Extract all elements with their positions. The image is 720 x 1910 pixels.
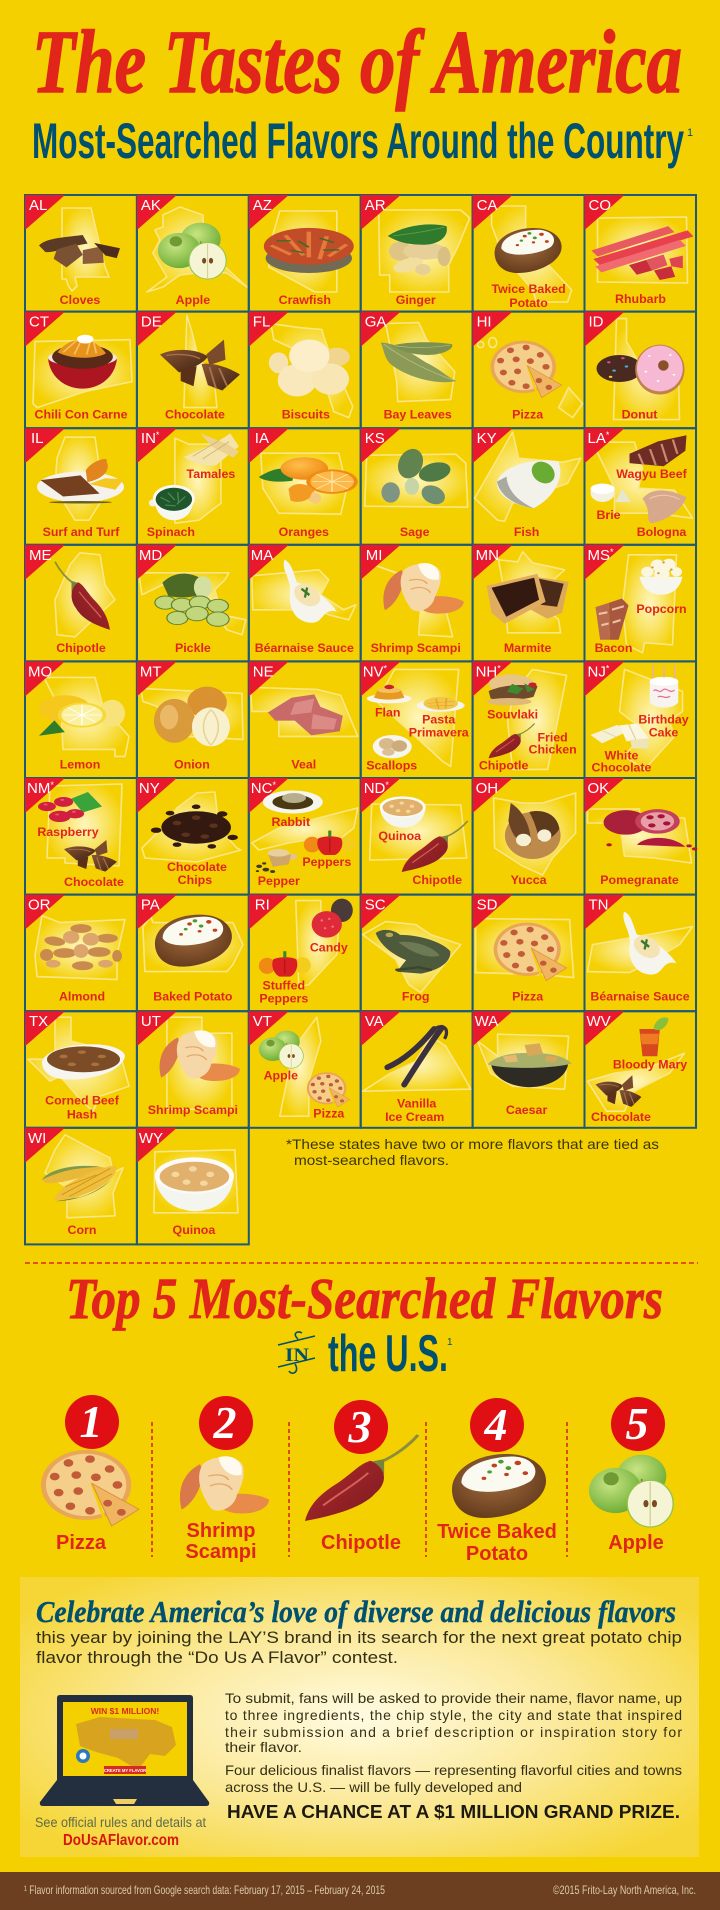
rank 5: Apple: Apple <box>608 1532 664 1554</box>
cell: California, Twice Baked Potato: Potato <box>509 296 548 310</box>
cell: Nevada, Flan, Pasta Primavera, Scallops <box>361 661 473 778</box>
cell: New Jersey, Birthday Cake, White Chocolate: White <box>605 748 638 762</box>
cell: North Carolina, Rabbit, Peppers, Pepper: * <box>272 780 276 790</box>
cell: Mississippi, Popcorn and Bacon: Bacon <box>595 641 632 655</box>
rank 4: Twice Baked Potato: Twice Baked <box>437 1521 557 1543</box>
cell: Montana, Onion: Onion <box>174 757 210 771</box>
cell: Minnesota, Marmite: Marmite <box>504 641 551 655</box>
cell: New Jersey, Birthday Cake, White Chocolate <box>584 661 696 778</box>
cell: New Jersey, Birthday Cake, White Chocolate: NJ <box>588 663 606 680</box>
cell: Maine, Chipotle <box>25 545 137 661</box>
cell: Colorado, Rhubarb <box>584 195 696 312</box>
cell: New Jersey, Birthday Cake, White Chocolate: Cake <box>649 725 678 739</box>
cell: Indiana, Tamales and Spinach: * <box>156 430 160 440</box>
panel: contest information <box>20 1577 699 1857</box>
cell: New Jersey, Birthday Cake, White Chocolate: Birthday <box>638 712 689 726</box>
cell: Alabama, Cloves: AL <box>29 197 47 214</box>
cell: Missouri, Lemon <box>25 661 137 778</box>
cell: Hawaii, Pizza <box>473 312 584 428</box>
footnote: tied states: *These states have two or more flavors that are tied as <box>286 1136 659 1152</box>
cell: Georgia, Bay Leaves: Bay Leaves <box>384 408 452 422</box>
rank 5: Apple <box>589 1397 673 1554</box>
cell: Rhode Island, Candy and Stuffed Peppers: Candy <box>310 941 348 955</box>
cell: Virginia, Vanilla Ice Cream: Ice Cream <box>385 1110 444 1124</box>
text: finalists: Four delicious finalist flavors — representing flavorful cities and towns <box>225 1762 682 1778</box>
text: how to submit: To submit, fans will be asked to provide their name, flavor name, up <box>225 1690 682 1706</box>
footnote: tied states <box>286 1136 659 1168</box>
cell: Vermont, Apple and Pizza <box>249 1011 361 1128</box>
cell: North Dakota, Quinoa and Chipotle <box>361 778 473 895</box>
cell: Kentucky, Fish <box>473 428 584 545</box>
cell: South Dakota, Pizza: SD <box>477 897 498 914</box>
rank 4: Twice Baked Potato <box>437 1398 557 1565</box>
text: intro <box>36 1628 682 1667</box>
footnote: tied states: most-searched flavors. <box>294 1152 449 1168</box>
cell: Nevada, Flan, Pasta Primavera, Scallops: NV <box>363 663 384 680</box>
cell: Arizona, Crawfish <box>249 195 361 312</box>
heading: in the U.S.: the U.S. <box>328 1325 448 1383</box>
cell: Rhode Island, Candy and Stuffed Peppers <box>249 895 361 1011</box>
cell: Alabama, Cloves: Cloves <box>60 293 100 307</box>
cell: Colorado, Rhubarb: CO <box>588 197 611 214</box>
rank 3: Chipotle: 3 <box>348 1401 372 1452</box>
cell: Utah, Shrimp Scampi: Shrimp Scampi <box>148 1103 238 1117</box>
cell: Minnesota, Marmite: MN <box>476 547 499 564</box>
cell: Virginia, Vanilla Ice Cream: VA <box>365 1013 384 1030</box>
cell: Tennessee, Bearnaise Sauce <box>584 895 696 1011</box>
cell: Indiana, Tamales and Spinach: Tamales <box>187 467 235 481</box>
cell: Idaho, Donut <box>584 312 696 428</box>
cell: Tennessee, Bearnaise Sauce: Béarnaise Sauce <box>590 990 690 1004</box>
cell: Ohio, Yucca: OH <box>476 780 498 797</box>
footer band: ¹ Flavor information sourced from Google search data: February 17, 2015 – February 24, 2015 <box>24 1883 385 1897</box>
cell: New Jersey, Birthday Cake, White Chocolate: * <box>606 663 610 673</box>
cell: West Virginia, Bloody Mary and Chocolate: Bloody Mary <box>613 1058 687 1072</box>
cell: Oregon, Almond <box>25 895 137 1011</box>
text: how to submit: their submission and a brief description or inspiration story for <box>225 1724 682 1740</box>
cell: Mississippi, Popcorn and Bacon: * <box>610 547 614 557</box>
cell: New Hampshire, Souvlaki, Fried Chicken, Chipotle: Chicken <box>528 742 577 756</box>
cell: Louisiana, Wagyu Beef, Brie, Bologna: Bologna <box>637 525 686 539</box>
cell: New Mexico, Raspberry and Chocolate: * <box>50 780 54 790</box>
cell: New Hampshire, Souvlaki, Fried Chicken, Chipotle: NH <box>476 663 497 680</box>
cell: North Dakota, Quinoa and Chipotle: Quinoa <box>378 829 421 843</box>
rank 4: Twice Baked Potato: 4 <box>484 1399 508 1450</box>
cell: Iowa, Oranges: IA <box>255 430 269 447</box>
cell: California, Twice Baked Potato <box>473 195 584 312</box>
cell: Wisconsin, Corn: Corn <box>68 1223 96 1237</box>
cell: Mississippi, Popcorn and Bacon: MS <box>588 547 610 564</box>
cell: Utah, Shrimp Scampi: UT <box>141 1013 161 1030</box>
cell: North Carolina, Rabbit, Peppers, Pepper: Pepper <box>258 874 300 888</box>
cell: New Hampshire, Souvlaki, Fried Chicken, Chipotle: * <box>497 663 501 673</box>
cell: Illinois, Surf and Turf: Surf and Turf <box>43 525 120 539</box>
cell: Nebraska, Veal: NE <box>253 663 274 680</box>
cell: Wisconsin, Corn <box>25 1128 137 1244</box>
cell: Minnesota, Marmite <box>473 545 584 661</box>
cell: West Virginia, Bloody Mary and Chocolate <box>584 1011 696 1128</box>
cell: South Dakota, Pizza: Pizza <box>512 990 543 1004</box>
rank 4: Twice Baked Potato: Potato <box>466 1543 528 1565</box>
cell: Louisiana, Wagyu Beef, Brie, Bologna: Wagyu Beef <box>616 467 688 481</box>
cell: Arizona, Crawfish: Crawfish <box>279 293 331 307</box>
cell: New York, Chocolate Chips: Chocolate <box>167 860 227 874</box>
cell: Iowa, Oranges <box>249 428 361 545</box>
cell: Nevada, Flan, Pasta Primavera, Scallops: Primavera <box>409 725 469 739</box>
cell: Arkansas, Ginger: Ginger <box>396 293 436 307</box>
cell: Oklahoma, Pomegranate: Pomegranate <box>600 873 679 887</box>
text: how to submit: to three ingredients, the chip style, the city and state that inspired <box>225 1707 682 1723</box>
cell: New Hampshire, Souvlaki, Fried Chicken, Chipotle <box>473 661 584 778</box>
rank 2: Shrimp Scampi: Scampi <box>185 1541 257 1563</box>
panel: state flavor grid <box>25 195 697 1244</box>
cell: North Carolina, Rabbit, Peppers, Pepper: NC <box>251 780 272 797</box>
cell: Delaware, Chocolate: Chocolate <box>165 408 225 422</box>
cell: Pennsylvania, Baked Potato: PA <box>141 897 160 914</box>
cell: Louisiana, Wagyu Beef, Brie, Bologna: LA <box>588 430 606 447</box>
cell: New York, Chocolate Chips: Chips <box>178 873 212 887</box>
cell: Illinois, Surf and Turf <box>25 428 137 545</box>
rank 2: Shrimp Scampi: Shrimp <box>187 1520 255 1542</box>
icon: laptop with contest screen <box>40 1695 209 1806</box>
cell: Massachusetts, Bearnaise Sauce: Béarnaise Sauce <box>255 641 354 655</box>
cell: Oklahoma, Pomegranate <box>584 778 697 895</box>
cell: Missouri, Lemon: MO <box>28 663 52 680</box>
cell: New Mexico, Raspberry and Chocolate: Raspberry <box>37 825 99 839</box>
cell: Wyoming, Quinoa <box>137 1128 249 1244</box>
cell: South Carolina, Frog <box>361 895 473 1011</box>
cell: North Dakota, Quinoa and Chipotle: Chipotle <box>412 873 462 887</box>
text: finalists: across the U.S. — will be fully developed and <box>225 1779 522 1795</box>
rank 3: Chipotle: Chipotle <box>321 1532 401 1554</box>
rank 1: Pizza: 1 <box>80 1396 102 1447</box>
cell: New Hampshire, Souvlaki, Fried Chicken, Chipotle: Fried <box>537 730 568 744</box>
cell: Georgia, Bay Leaves: GA <box>365 314 386 331</box>
cell: Texas, Corned Beef Hash: Corned Beef <box>45 1094 119 1108</box>
cell: North Dakota, Quinoa and Chipotle: ND <box>364 780 385 797</box>
text: how to submit <box>225 1690 682 1755</box>
cell: Montana, Onion <box>137 661 249 778</box>
cell: Kentucky, Fish: KY <box>477 430 497 447</box>
cell: Nebraska, Veal: Veal <box>291 757 316 771</box>
cell: Pennsylvania, Baked Potato <box>137 895 249 1011</box>
text: official rules: See official rules and details at <box>35 1814 206 1830</box>
cell: New York, Chocolate Chips <box>137 778 249 895</box>
cell: Alaska, Apple: AK <box>141 197 161 214</box>
cell: Nevada, Flan, Pasta Primavera, Scallops: Scallops <box>366 758 417 772</box>
cell: Alabama, Cloves <box>25 195 137 312</box>
cell: Washington, Caesar: WA <box>475 1013 498 1030</box>
text: grand prize: HAVE A CHANCE AT A $1 MILLION GRAND PRIZE. <box>227 1802 680 1822</box>
cell: Indiana, Tamales and Spinach: Spinach <box>147 525 195 539</box>
cell: Arkansas, Ginger <box>361 195 473 312</box>
cell: Washington, Caesar <box>473 1011 584 1128</box>
cell: Mississippi, Popcorn and Bacon: Popcorn <box>636 602 687 616</box>
cell: New Mexico, Raspberry and Chocolate: NM <box>27 780 50 797</box>
cell: Pennsylvania, Baked Potato: Baked Potato <box>153 990 233 1004</box>
footer band <box>0 1872 720 1910</box>
cell: New Jersey, Birthday Cake, White Chocolate: Chocolate <box>592 760 652 774</box>
cell: Vermont, Apple and Pizza: VT <box>253 1013 272 1030</box>
cell: Massachusetts, Bearnaise Sauce <box>249 545 361 661</box>
cell: North Carolina, Rabbit, Peppers, Pepper <box>249 778 361 895</box>
cell: Virginia, Vanilla Ice Cream: Vanilla <box>397 1097 436 1111</box>
cell: Wisconsin, Corn: WI <box>28 1130 46 1147</box>
cell: Colorado, Rhubarb: Rhubarb <box>615 292 666 306</box>
cell: Nevada, Flan, Pasta Primavera, Scallops: Pasta <box>422 712 455 726</box>
rank 1: Pizza: Pizza <box>56 1532 107 1554</box>
cell: Arizona, Crawfish: AZ <box>253 197 272 214</box>
cell: Tennessee, Bearnaise Sauce: TN <box>588 897 608 914</box>
cell: Oregon, Almond: Almond <box>59 990 105 1004</box>
text: finalists <box>225 1762 682 1795</box>
cell: Kansas, Sage <box>361 428 473 545</box>
cell: Oklahoma, Pomegranate: OK <box>588 780 609 797</box>
cell: Florida, Biscuits: Biscuits <box>282 408 330 422</box>
cell: Nevada, Flan, Pasta Primavera, Scallops: * <box>384 663 388 673</box>
cell: Arkansas, Ginger: AR <box>365 197 386 214</box>
cell: Maryland, Pickle: Pickle <box>175 641 211 655</box>
cell: Louisiana, Wagyu Beef, Brie, Bologna: * <box>606 430 610 440</box>
cell: California, Twice Baked Potato: Twice Baked <box>492 282 566 296</box>
cell: Texas, Corned Beef Hash: TX <box>29 1013 48 1030</box>
cell: Montana, Onion: MT <box>140 663 162 680</box>
cell: Michigan, Shrimp Scampi <box>361 545 473 661</box>
cell: Indiana, Tamales and Spinach: IN <box>141 430 156 447</box>
cell: New York, Chocolate Chips: NY <box>139 780 160 797</box>
cell: South Carolina, Frog: SC <box>365 897 386 914</box>
cell: Maryland, Pickle <box>137 545 249 661</box>
cell: West Virginia, Bloody Mary and Chocolate: WV <box>586 1013 611 1030</box>
cell: New Mexico, Raspberry and Chocolate <box>25 778 137 895</box>
cell: New Hampshire, Souvlaki, Fried Chicken, Chipotle: Chipotle <box>479 758 528 772</box>
text: official rules: DoUsAFlavor.com <box>63 1832 179 1849</box>
cell: Vermont, Apple and Pizza: Apple <box>264 1069 298 1083</box>
cell: West Virginia, Bloody Mary and Chocolate: Chocolate <box>591 1110 651 1124</box>
cell: Connecticut, Chili Con Carne: Chili Con Carne <box>35 408 128 422</box>
cell: Connecticut, Chili Con Carne <box>25 312 137 428</box>
cell: Maine, Chipotle: Chipotle <box>56 641 106 655</box>
cell: Ohio, Yucca <box>473 778 584 895</box>
cell: Connecticut, Chili Con Carne: CT <box>29 314 49 331</box>
cell: Mississippi, Popcorn and Bacon <box>584 545 696 661</box>
cell: Wyoming, Quinoa: WY <box>139 1130 163 1147</box>
cell: California, Twice Baked Potato: CA <box>477 197 497 214</box>
icon: laptop with contest screen: WIN $1 MILLION! <box>91 1706 159 1716</box>
cell: Vermont, Apple and Pizza: Pizza <box>313 1107 344 1121</box>
cell: Rhode Island, Candy and Stuffed Peppers: RI <box>255 897 270 914</box>
cell: Louisiana, Wagyu Beef, Brie, Bologna <box>584 428 696 545</box>
cell: Indiana, Tamales and Spinach <box>137 428 249 545</box>
cell: Kentucky, Fish: Fish <box>514 525 539 539</box>
cell: Michigan, Shrimp Scampi: Shrimp Scampi <box>371 641 461 655</box>
cell: Florida, Biscuits <box>249 312 361 428</box>
cell: New Mexico, Raspberry and Chocolate: Chocolate <box>64 875 124 889</box>
cell: Ohio, Yucca: Yucca <box>511 873 547 887</box>
cell: Missouri, Lemon: Lemon <box>60 757 100 771</box>
rank 2: Shrimp Scampi <box>180 1396 269 1563</box>
text: official rules <box>35 1814 206 1849</box>
cell: Utah, Shrimp Scampi <box>137 1011 249 1128</box>
cell: Idaho, Donut: ID <box>588 314 604 331</box>
cell: Delaware, Chocolate <box>137 312 249 428</box>
cell: Delaware, Chocolate: DE <box>141 314 162 331</box>
cell: South Carolina, Frog: Frog <box>402 990 429 1004</box>
cell: Alaska, Apple: Apple <box>176 293 210 307</box>
heading: in the U.S.: 1 <box>447 1337 453 1348</box>
cell: Kansas, Sage: KS <box>365 430 385 447</box>
cell: Texas, Corned Beef Hash <box>25 1011 137 1128</box>
text: intro: this year by joining the LAY’S brand in its search for the next great potato chip <box>36 1628 682 1647</box>
cell: Georgia, Bay Leaves <box>361 312 473 428</box>
cell: Nebraska, Veal <box>249 661 361 778</box>
rank 3: Chipotle <box>305 1400 418 1554</box>
cell: Virginia, Vanilla Ice Cream <box>361 1011 473 1128</box>
cell: Hawaii, Pizza: HI <box>477 314 492 331</box>
rank 2: Shrimp Scampi: 2 <box>212 1397 236 1448</box>
rank 1: Pizza <box>41 1395 139 1554</box>
subtitle: 1 <box>687 127 693 139</box>
cell: Alaska, Apple <box>137 195 249 312</box>
text: how to submit: their flavor. <box>225 1739 302 1755</box>
rank 5: Apple: 5 <box>626 1398 648 1449</box>
cell: Massachusetts, Bearnaise Sauce: MA <box>251 547 273 564</box>
cell: Maryland, Pickle: MD <box>139 547 162 564</box>
heading: in the U.S. <box>278 1325 453 1383</box>
cell: Maine, Chipotle: ME <box>29 547 52 564</box>
cell: South Dakota, Pizza <box>473 895 584 1011</box>
cell: Wyoming, Quinoa: Quinoa <box>173 1223 215 1237</box>
cell: Kansas, Sage: Sage <box>400 525 430 539</box>
cell: Oregon, Almond: OR <box>28 897 51 914</box>
heading: in the U.S.: IN <box>285 1345 309 1366</box>
cell: Michigan, Shrimp Scampi: MI <box>366 547 382 564</box>
cell: Idaho, Donut: Donut <box>622 408 657 422</box>
cell: Rhode Island, Candy and Stuffed Peppers: Peppers <box>259 992 308 1006</box>
cell: North Carolina, Rabbit, Peppers, Pepper: Rabbit <box>272 815 310 829</box>
icon: laptop with contest screen: CREATE MY FLAVOR <box>104 1768 146 1773</box>
cell: Texas, Corned Beef Hash: Hash <box>67 1108 97 1122</box>
cell: Nevada, Flan, Pasta Primavera, Scallops: Flan <box>375 705 400 719</box>
cell: Louisiana, Wagyu Beef, Brie, Bologna: Brie <box>596 508 621 522</box>
cell: Florida, Biscuits: FL <box>253 314 270 331</box>
cell: Rhode Island, Candy and Stuffed Peppers: Stuffed <box>262 979 305 993</box>
cell: North Carolina, Rabbit, Peppers, Pepper: Peppers <box>302 855 351 869</box>
cell: Washington, Caesar: Caesar <box>506 1103 547 1117</box>
cell: Iowa, Oranges: Oranges <box>279 525 329 539</box>
cell: Illinois, Surf and Turf: IL <box>31 430 44 447</box>
cell: New Hampshire, Souvlaki, Fried Chicken, Chipotle: Souvlaki <box>487 707 538 721</box>
text: intro: flavor through the “Do Us A Flavor” contest. <box>36 1648 398 1667</box>
cell: Hawaii, Pizza: Pizza <box>512 408 543 422</box>
cell: North Dakota, Quinoa and Chipotle: * <box>385 780 389 790</box>
